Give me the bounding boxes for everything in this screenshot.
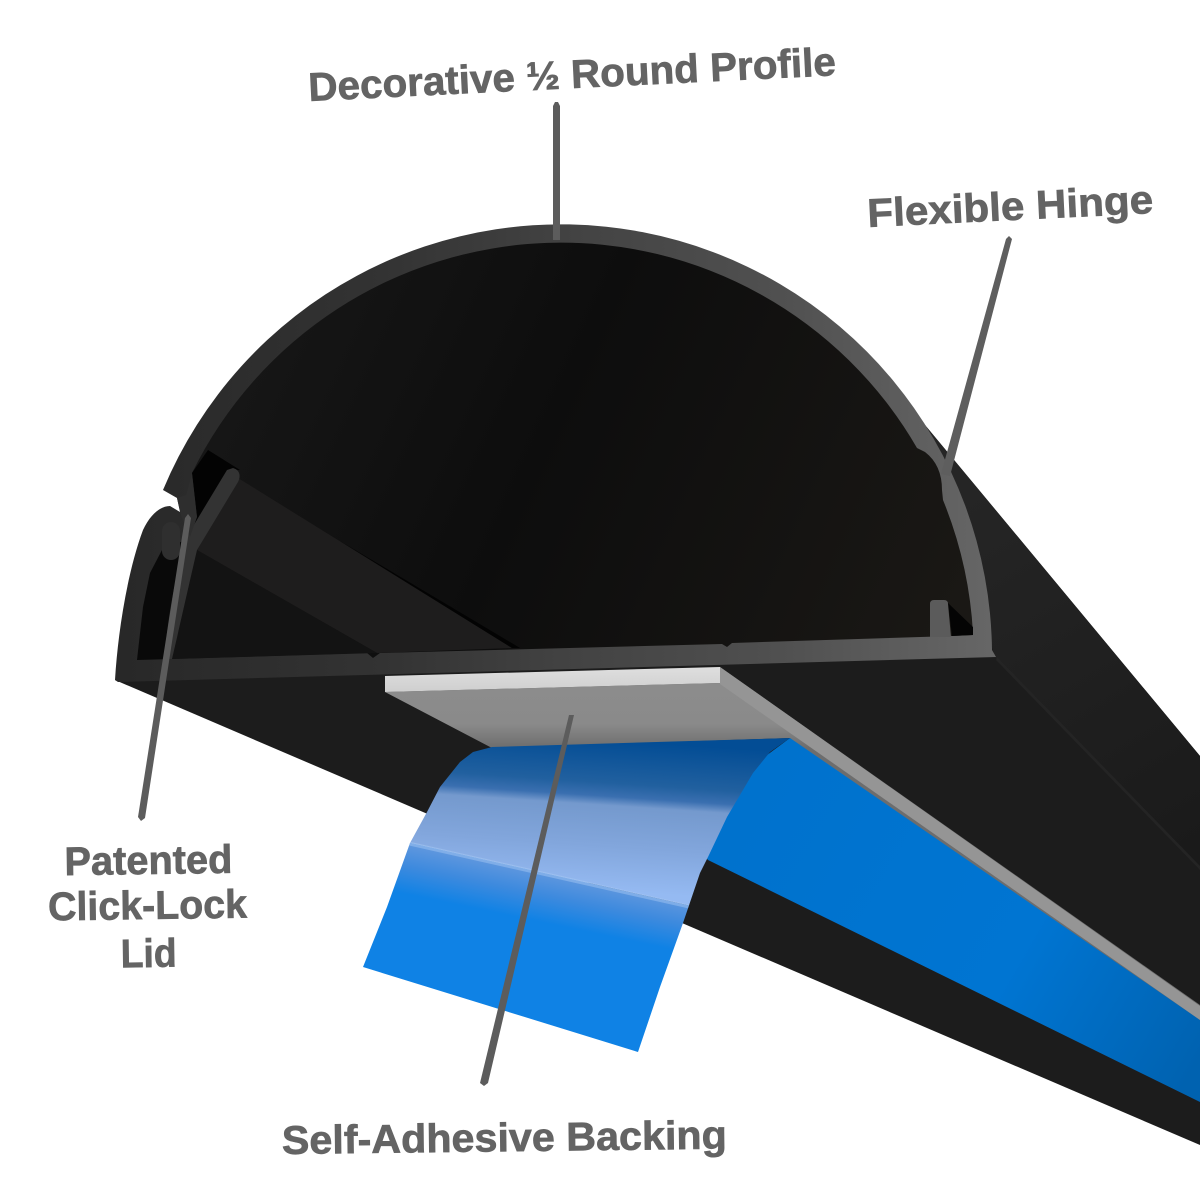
- label: patented click-lock lid: Lid: [120, 932, 177, 976]
- label: patented click-lock lid: [47, 838, 249, 977]
- click-lock lid details: [162, 468, 240, 659]
- locating tab: [930, 600, 951, 637]
- label: self-adhesive backing: Self-Adhesive Backing: [282, 1114, 727, 1163]
- label: patented click-lock lid: Patented: [64, 838, 233, 884]
- foam tape: [385, 667, 1200, 1020]
- interior of half round profile: [115, 224, 996, 682]
- blue adhesive liner strip: [700, 738, 1200, 1102]
- pointer line: decorative profile: [553, 102, 560, 240]
- blue peeled backing flap: [363, 738, 790, 1052]
- pointer line: click-lock lid: [138, 514, 191, 821]
- raceway body exterior: [115, 425, 1200, 1145]
- label: patented click-lock lid: Click-Lock: [48, 883, 248, 929]
- pointer line: self-adhesive backing: [480, 715, 574, 1086]
- label: decorative half round profile: Decorative ½ Round Profile: [307, 40, 837, 110]
- label: flexible hinge: Flexible Hinge: [866, 178, 1154, 236]
- pointer line: flexible hinge: [941, 236, 1012, 476]
